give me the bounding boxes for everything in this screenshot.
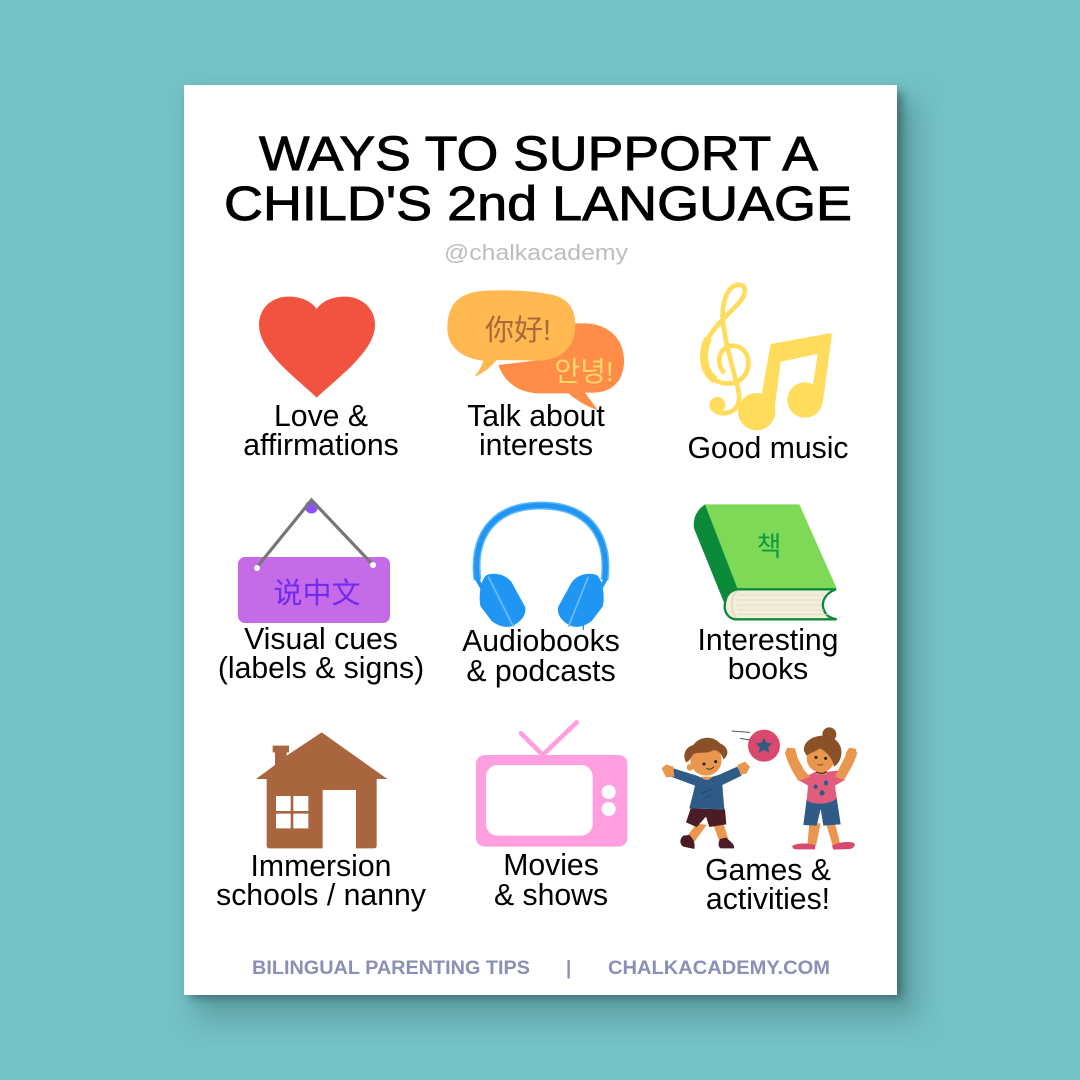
label: good music: Good music <box>687 432 849 465</box>
footer <box>252 958 830 979</box>
icon: hanging sign: 说中文 <box>273 577 361 610</box>
icon: green book <box>694 504 837 619</box>
label: interesting books: Interesting <box>698 624 838 657</box>
icon: yellow speech bubble <box>447 290 575 377</box>
icon: headphones <box>477 506 606 630</box>
item: visual cues <box>218 500 424 685</box>
label: movies and shows: Movies <box>503 849 599 882</box>
item: interesting books <box>694 504 838 686</box>
label: love and affirmations: Love & <box>274 400 368 433</box>
label: immersion schools or nanny: schools / nanny <box>216 879 427 912</box>
icon: orange speech bubble <box>498 323 624 410</box>
icon: treble clef <box>704 285 748 413</box>
icon: green book: 책 <box>757 532 781 562</box>
footer: | <box>566 958 571 979</box>
item: immersion schools or nanny <box>216 732 427 912</box>
title <box>224 127 852 231</box>
footer: CHALKACADEMY.COM <box>608 958 830 979</box>
label: audiobooks and podcasts: Audiobooks <box>462 625 620 658</box>
icon: orange speech bubble: 안녕! <box>554 356 614 387</box>
icon: girl <box>785 727 857 850</box>
item: talk about interests <box>447 290 624 462</box>
handle: @chalkacademy: @chalkacademy <box>444 240 628 265</box>
title: WAYS TO SUPPORT A <box>259 127 819 181</box>
footer: BILINGUAL PARENTING TIPS <box>252 958 530 979</box>
icon: brown house <box>256 732 387 849</box>
label: immersion schools or nanny: Immersion <box>251 850 391 883</box>
icon: music notes <box>738 333 832 430</box>
icon: yellow speech bubble: 你好! <box>485 314 551 347</box>
label: movies and shows: & shows <box>494 879 608 912</box>
label: visual cues: Visual cues <box>244 623 398 656</box>
label: games and activities: Games & <box>705 854 831 887</box>
icon: pink television <box>476 722 627 847</box>
item: love and affirmations <box>243 297 399 462</box>
item: good music <box>687 285 849 465</box>
label: interesting books: books <box>728 653 808 686</box>
icon: boy <box>662 738 750 849</box>
icon: hanging sign <box>238 500 390 623</box>
label: games and activities: activities! <box>706 883 830 916</box>
item: games and activities <box>662 727 857 916</box>
label: talk about interests: Talk about <box>467 400 605 433</box>
panel: poster card <box>184 85 897 995</box>
item: audiobooks and podcasts <box>462 506 620 688</box>
label: talk about interests: interests <box>479 429 593 462</box>
label: audiobooks and podcasts: & podcasts <box>466 655 616 688</box>
label: visual cues: (labels & signs) <box>218 652 424 685</box>
item: movies and shows <box>476 722 627 912</box>
icon: ball <box>732 730 780 762</box>
icon: heart <box>259 297 375 398</box>
label: love and affirmations: affirmations <box>243 429 399 462</box>
title: CHILD'S 2nd LANGUAGE <box>224 177 852 231</box>
